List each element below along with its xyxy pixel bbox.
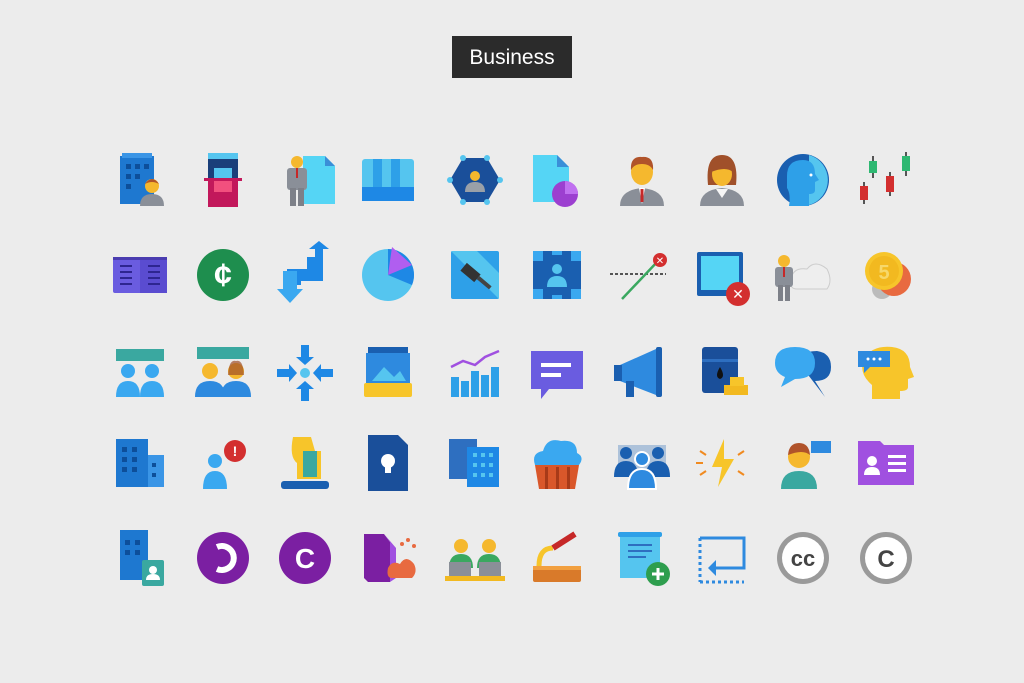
icon: CC	[777, 532, 829, 584]
icon: two avatars	[195, 347, 251, 397]
icon: barrel with gold	[702, 347, 748, 395]
icon: blue table	[362, 159, 414, 201]
icon: purple circle ring	[197, 532, 249, 584]
title: Business	[469, 46, 555, 69]
icon: square brush	[451, 251, 499, 299]
icon: line bar chart	[451, 351, 499, 397]
icon: document with pie	[533, 155, 578, 207]
icon: person alert: !	[233, 443, 237, 459]
icon: two people at laptops	[445, 539, 505, 581]
title	[452, 36, 572, 78]
icon: hexagon person	[447, 155, 503, 205]
icon: converging arrows	[277, 345, 333, 401]
icon: copyright	[860, 532, 912, 584]
icon: copyright: C	[877, 546, 895, 573]
icon: coins: 5	[878, 262, 890, 284]
icon: person alert	[203, 440, 246, 489]
icon: cupcake	[534, 440, 582, 489]
icon: window with x	[697, 252, 750, 306]
icon: list panel	[113, 257, 167, 293]
icon: person with bubble	[781, 441, 831, 489]
icon: voting hand	[281, 437, 329, 489]
icon: CC: cc	[791, 546, 815, 571]
icon: building with lock	[120, 530, 164, 586]
icon: lightning	[696, 439, 744, 487]
icon: purple C	[279, 532, 331, 584]
icon: candlesticks	[860, 152, 910, 204]
icon: person square	[533, 251, 581, 299]
icon: building with person	[120, 153, 164, 206]
icon: buildings	[449, 439, 499, 487]
icon: purple shape with cloud	[364, 534, 416, 582]
icon: woman avatar	[700, 155, 744, 206]
icon: scroll with plus	[618, 532, 670, 586]
icon: ID card	[858, 441, 914, 485]
icon: line with x: ✕	[656, 256, 664, 267]
icon: cent coin	[197, 249, 249, 301]
icon: head with bubble	[858, 347, 914, 399]
icon: purple C: C	[295, 543, 315, 574]
icon: line with x	[610, 253, 667, 299]
icon: group	[614, 445, 670, 489]
icon: person with document	[287, 156, 335, 206]
icon: office building	[116, 439, 164, 487]
icon: chat bubbles	[775, 347, 831, 397]
icon: phone scanner	[204, 153, 242, 207]
icon: tool on block	[533, 534, 581, 582]
icon: pie chart	[362, 247, 414, 301]
icon: circle profile	[777, 154, 829, 206]
icon: person with cloud	[775, 255, 830, 301]
icon: window with x: ✕	[732, 286, 744, 302]
icon: coins	[865, 252, 911, 299]
icon: two people chat	[116, 349, 164, 397]
icon: document bulb	[368, 435, 408, 491]
icon: man avatar	[620, 157, 664, 206]
icon: zigzag arrows	[277, 241, 329, 303]
icon: speech bubble	[531, 351, 583, 399]
icon: cent coin: ¢	[214, 257, 232, 293]
icon: megaphone	[614, 347, 662, 397]
icon: return arrow dotted	[700, 538, 744, 582]
icon: picture tray	[364, 347, 412, 397]
